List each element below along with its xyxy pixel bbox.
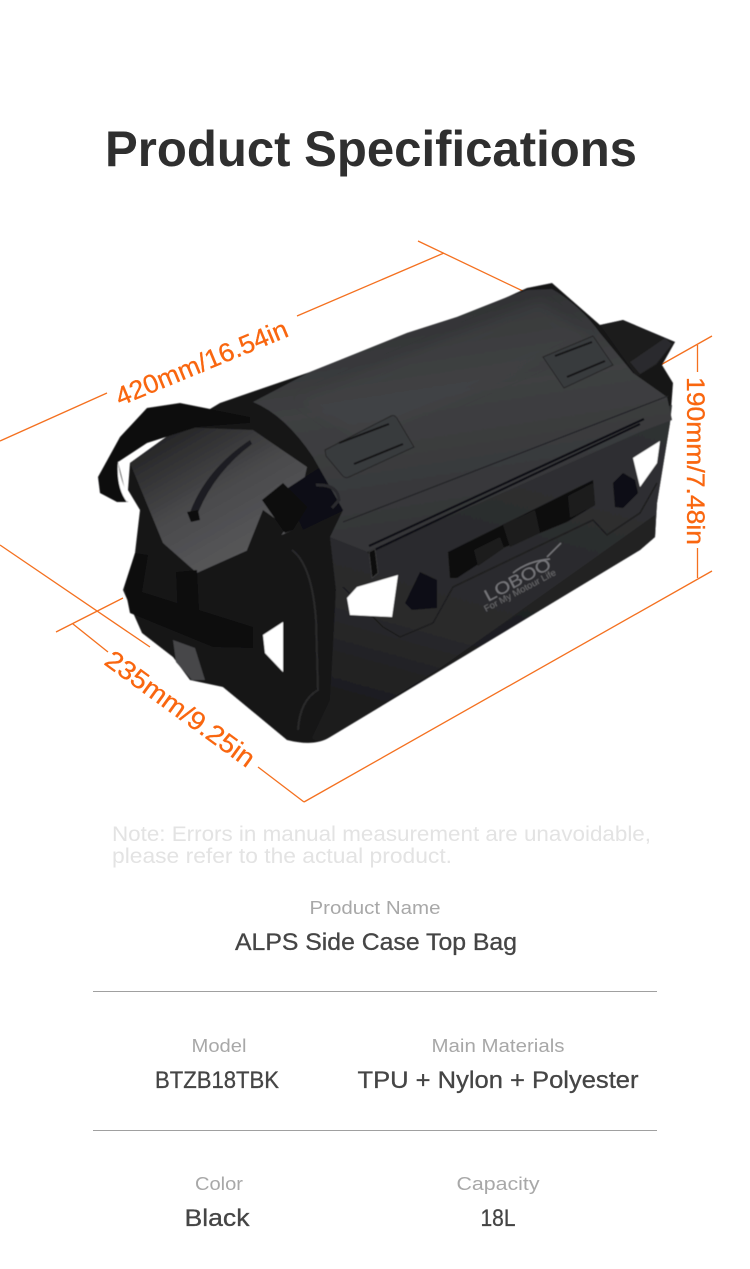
flap seam xyxy=(343,396,668,522)
spec: color: Black xyxy=(184,1205,251,1232)
depth dimension line xyxy=(0,545,304,802)
dimension lines xyxy=(0,241,712,802)
spec: color xyxy=(184,1174,251,1232)
spec: model: Model xyxy=(192,1036,246,1056)
spec: capacity xyxy=(456,1174,540,1232)
product photo: black bag xyxy=(98,283,675,743)
spec: capacity: Capacity xyxy=(456,1174,540,1194)
webbing daisy chain xyxy=(448,480,595,578)
front seam line xyxy=(343,483,657,637)
lower clip xyxy=(173,640,205,680)
depth label: 235mm/9.25in xyxy=(99,644,261,773)
reflector: front right xyxy=(633,441,660,487)
spec: capacity: 18L xyxy=(480,1205,516,1232)
spec: model xyxy=(155,1036,279,1094)
lower right dark band xyxy=(330,515,655,737)
width dimension line xyxy=(0,241,527,441)
lower compression strap xyxy=(125,553,253,648)
measurement note: please refer to the actual product. xyxy=(112,845,452,868)
rear padded handle xyxy=(600,320,675,377)
side edge seam xyxy=(292,550,318,730)
spec: product name: Product Name xyxy=(310,898,440,918)
spec: main materials: TPU + Nylon + Polyester xyxy=(358,1067,639,1094)
lower side block xyxy=(197,530,345,738)
title: Product Specifications xyxy=(105,121,637,177)
strap over shoulder under the lid xyxy=(285,467,345,530)
spec: color: Color xyxy=(195,1174,243,1194)
logo xyxy=(481,543,561,606)
spec: product name: ALPS Side Case Top Bag xyxy=(235,929,517,956)
spec: main materials xyxy=(358,1036,639,1094)
lid patch right xyxy=(543,336,613,388)
front panel xyxy=(312,405,672,741)
measurement note: Note: Errors in manual measurement are unavoidable, xyxy=(112,823,651,846)
logo: LOBOO xyxy=(481,554,554,606)
roll top seam and zipper xyxy=(368,419,644,553)
reflector: left corner xyxy=(263,622,283,672)
spec: product name xyxy=(235,898,517,956)
height dimension line xyxy=(657,336,712,578)
front right latch xyxy=(613,473,638,508)
width label: 420mm/16.54in xyxy=(111,314,292,412)
spec: model: BTZB18TBK xyxy=(155,1067,279,1094)
front zipper pull xyxy=(369,549,378,578)
length baseline xyxy=(304,571,712,802)
front left latch xyxy=(405,572,437,610)
logo tagline: For My Motour Life xyxy=(482,567,558,614)
white gap under handle xyxy=(118,461,130,502)
lid flap xyxy=(253,289,672,552)
side buckle xyxy=(262,483,339,533)
side pocket zipper xyxy=(189,440,252,518)
reflector: front left xyxy=(347,575,398,617)
side pocket pull xyxy=(187,510,200,522)
bag silhouette xyxy=(123,283,675,743)
vertical side webbing xyxy=(176,570,200,628)
top shoulder strap xyxy=(98,403,250,502)
lid shading xyxy=(300,300,590,440)
vertical strap xyxy=(247,510,287,593)
measurement note xyxy=(112,823,651,868)
spec: main materials: Main Materials xyxy=(432,1036,564,1056)
lid patch left xyxy=(325,416,414,478)
height label: 190mm/7.48in xyxy=(681,377,709,545)
handle inner padding xyxy=(630,338,672,374)
side fold panel xyxy=(130,427,307,573)
